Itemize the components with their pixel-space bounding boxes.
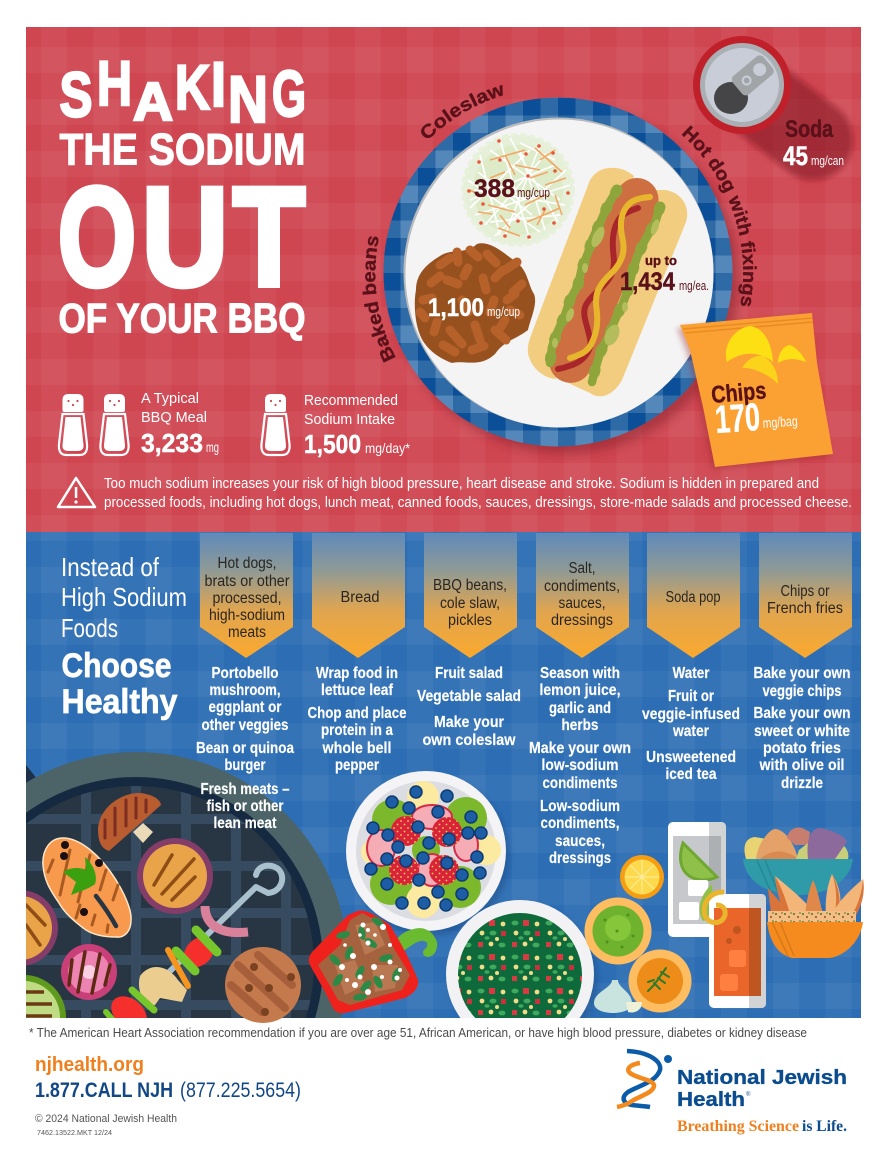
copyright: 7462.13522.MKT 12/24	[37, 1128, 112, 1137]
chevron: sides: cole slaw,	[440, 595, 500, 612]
food: hot dog with fixings	[528, 168, 687, 396]
chevron: condiments: Salt,	[568, 560, 596, 577]
choose: condiments alternatives	[529, 665, 631, 867]
chevron: soda pop: Soda pop	[666, 589, 720, 606]
choose: sides alternatives: Fruit salad	[435, 665, 503, 682]
title: A	[133, 72, 173, 132]
plate shadow	[391, 106, 739, 454]
chevron: bread: Bread	[340, 589, 380, 606]
icon: one salt shaker	[261, 394, 290, 455]
curved label: Hot dog with fixings: Hot dog with fixings	[682, 125, 757, 306]
recommended intake stat: 1,500	[304, 429, 361, 459]
choose: condiments alternatives: Make your own	[529, 740, 631, 757]
illustration: lemon slice	[620, 855, 664, 899]
soda label: 45	[783, 141, 808, 171]
illustration: veggie chips in teal bowl	[743, 827, 853, 895]
illustration: stuffed red pepper	[309, 911, 437, 1013]
chips sodium value: 170	[714, 396, 762, 442]
chevron: meats: high-sodium	[209, 607, 285, 624]
food: baked beans	[415, 243, 535, 363]
fruit salad plate	[346, 771, 510, 936]
phone	[35, 1079, 301, 1102]
choose: condiments alternatives: herbs	[562, 717, 598, 734]
choose: meats alternatives: eggplant or	[208, 699, 282, 716]
choose: soda alternatives: veggie-infused	[642, 706, 740, 723]
grilled salmon	[43, 838, 131, 937]
eggplant slices	[26, 838, 213, 966]
footnote: * The American Heart Association recommendation if you are over age 51, African American, or have high blood pressure, diabetes or kidney disease	[29, 1025, 807, 1040]
recommended intake stat	[304, 393, 410, 459]
food: coleslaw	[463, 135, 573, 245]
choose: meats alternatives: burger	[224, 757, 266, 774]
chevron: chips: French fries	[767, 600, 843, 617]
choose: soda alternatives: Unsweetened	[646, 749, 736, 766]
recommended intake stat: mg/day*	[365, 440, 410, 456]
curved label: Baked beans: Baked beans	[362, 236, 396, 363]
choose: soda alternatives	[642, 665, 740, 783]
title: H	[97, 49, 132, 119]
choose: meats alternatives: Bean or quinoa	[196, 740, 294, 757]
illustration: orange dip with herb	[628, 950, 692, 1012]
chevron: meats: processed,	[212, 590, 282, 607]
logo: National Jewish Health: National Jewish	[677, 1067, 847, 1089]
phone: 1.877.CALL NJH	[35, 1079, 173, 1102]
choose: meats alternatives: fish or other	[206, 798, 284, 815]
choose: bread alternatives: whole bell	[322, 740, 392, 757]
choose: bread alternatives: protein in a	[321, 722, 393, 739]
grilled sausage slice	[98, 793, 161, 851]
chevron: sides: BBQ beans,	[433, 577, 507, 594]
choose: condiments alternatives: low-sodium	[542, 757, 618, 774]
icon: two salt shakers	[59, 394, 129, 455]
chevron: condiments: sauces,	[558, 595, 606, 612]
logo: National Jewish Health: is Life.	[802, 1118, 847, 1135]
choose: bread alternatives: Wrap food in	[316, 665, 398, 682]
icon: warning triangle	[58, 478, 95, 507]
logo: National Jewish Health: ®	[746, 1091, 751, 1098]
skewer	[105, 866, 282, 1037]
soda label: mg/can	[811, 153, 844, 168]
choose: condiments alternatives: lemon juice,	[540, 682, 620, 699]
chips sodium value: Chips	[710, 377, 767, 409]
choose: meats alternatives: mushroom,	[210, 682, 280, 699]
section heading: Foods	[61, 613, 118, 643]
illustration: green dip	[584, 898, 652, 964]
choose: chips alternatives: Bake your own	[754, 665, 850, 682]
choose: condiments alternatives: condiments	[542, 775, 618, 792]
icon: chips bag	[677, 313, 833, 470]
choose: bread alternatives	[308, 665, 407, 774]
section heading: Instead of	[61, 552, 160, 582]
copyright	[35, 1113, 177, 1137]
beans sodium value	[428, 294, 520, 322]
choose: condiments alternatives: condiments,	[540, 815, 620, 832]
phone: (877.225.5654)	[180, 1079, 301, 1102]
choose: meats alternatives	[196, 665, 294, 832]
copyright: © 2024 National Jewish Health	[35, 1113, 177, 1125]
hot dog sodium value: 1,434	[620, 268, 675, 296]
choose: meats alternatives: Fresh meats –	[200, 781, 290, 798]
title: N	[228, 62, 268, 136]
section heading: Healthy	[62, 683, 178, 721]
illustration: potato wedges in orange bowl	[767, 874, 864, 958]
illustration: garlic	[594, 980, 642, 1013]
coleslaw sodium value: 388	[474, 175, 515, 203]
recommended intake stat: Recommended	[304, 393, 398, 409]
chevron: meats: Hot dogs,	[218, 555, 276, 572]
choose: soda alternatives: Water	[672, 665, 710, 682]
hot dog sodium value: up to	[645, 253, 677, 268]
title: OF YOUR BBQ	[58, 294, 306, 342]
chevron: condiments: condiments,	[544, 578, 620, 595]
section heading: Choose	[62, 647, 172, 685]
choose: chips alternatives: potato fries	[763, 740, 841, 757]
plate	[384, 98, 732, 446]
title: I	[211, 50, 226, 120]
choose: soda alternatives: water	[672, 723, 709, 740]
soda label	[783, 116, 844, 171]
choose: bread alternatives: lettuce leaf	[321, 682, 394, 699]
illustration: iced tea drink	[704, 892, 766, 1008]
beans sodium value: mg/cup	[487, 304, 520, 319]
logo helix	[617, 1051, 672, 1107]
choose: chips alternatives: Bake your own	[754, 705, 850, 722]
chevron: meats: brats or other	[204, 573, 290, 590]
choose: condiments alternatives: sauces,	[555, 833, 605, 850]
choose: condiments alternatives: dressings	[549, 850, 611, 867]
title: K	[175, 53, 210, 123]
choose: bread alternatives: pepper	[335, 757, 379, 774]
choose: chips alternatives	[754, 665, 850, 792]
section heading: High Sodium	[61, 582, 187, 612]
hot dog sodium value	[620, 253, 709, 296]
website: njhealth.org	[35, 1054, 144, 1076]
choose: sides alternatives: Make your	[434, 714, 504, 731]
choose: chips alternatives: sweet or white	[754, 723, 850, 740]
choose: meats alternatives: other veggies	[202, 717, 288, 734]
chevron: condiments	[536, 533, 629, 658]
chevron: sides: pickles	[448, 612, 492, 629]
burger patty	[225, 947, 301, 1023]
icon: soda can with shadow	[693, 36, 813, 140]
choose: condiments alternatives: Low-sodium	[540, 798, 620, 815]
chevron: chips	[759, 533, 852, 658]
section heading	[61, 552, 187, 721]
title: U	[142, 158, 228, 315]
choose: condiments alternatives: garlic and	[549, 700, 611, 717]
panel: blue gingham alternatives section	[26, 532, 861, 1018]
title: T	[233, 158, 305, 315]
beans sodium value: 1,100	[428, 294, 484, 322]
choose: soda alternatives: iced tea	[666, 766, 717, 783]
chips sodium value	[710, 377, 798, 442]
choose: condiments alternatives: Season with	[540, 665, 620, 682]
chips sodium value: mg/bag	[762, 413, 798, 431]
choose: soda alternatives: Fruit or	[668, 688, 714, 705]
title	[58, 49, 306, 342]
logo: National Jewish Health	[617, 1051, 847, 1135]
hot dog sodium value: mg/ea.	[679, 278, 709, 293]
grilled zucchini	[26, 975, 66, 1018]
chevron: meats: meats	[228, 624, 266, 641]
choose: sides alternatives	[417, 665, 521, 749]
warning text: Too much sodium increases your risk of high blood pressure, heart disease and stroke. Sodium is hidden in prepared and	[104, 476, 819, 492]
title: O	[58, 158, 136, 315]
illustration: grill	[26, 752, 344, 1018]
typical BBQ meal stat	[141, 391, 219, 458]
choose: bread alternatives: Chop and place	[308, 705, 407, 722]
choose: chips alternatives: veggie chips	[762, 683, 842, 700]
choose: meats alternatives: Portobello	[212, 665, 278, 682]
curved label: Coleslaw: Coleslaw	[421, 84, 503, 138]
logo: National Jewish Health: Health	[677, 1089, 745, 1111]
choose: sides alternatives: Vegetable salad	[417, 688, 521, 705]
choose: meats alternatives: lean meat	[214, 815, 276, 832]
chevron: bread	[312, 533, 405, 658]
soda label: Soda	[785, 116, 834, 143]
typical BBQ meal stat: 3,233	[141, 428, 203, 458]
grilled onion	[61, 944, 117, 1000]
typical BBQ meal stat: mg	[206, 439, 219, 455]
typical BBQ meal stat: A Typical	[141, 391, 199, 407]
coleslaw sodium value	[474, 175, 550, 203]
title: G	[272, 57, 306, 130]
coleslaw sodium value: mg/cup	[517, 185, 550, 200]
choose: sides alternatives: own coleslaw	[422, 732, 516, 749]
illustration: vegetable salad plate	[446, 900, 599, 1018]
chevron: meats	[200, 533, 293, 658]
warning text	[104, 476, 852, 511]
illustration: lime drink	[668, 822, 726, 937]
title: THE SODIUM	[60, 126, 306, 174]
typical BBQ meal stat: BBQ Meal	[141, 410, 207, 426]
choose: chips alternatives: with olive oil	[759, 757, 844, 774]
chevron: condiments: dressings	[551, 612, 613, 629]
logo: National Jewish Health: Breathing Science	[677, 1118, 799, 1135]
choose: chips alternatives: drizzle	[781, 775, 823, 792]
panel: red gingham BBQ section	[26, 27, 861, 532]
recommended intake stat: Sodium Intake	[304, 412, 395, 428]
chevron: sides	[424, 533, 517, 658]
title: S	[60, 60, 92, 130]
chevron: soda pop	[647, 533, 740, 658]
chevron: chips: Chips or	[780, 583, 830, 600]
